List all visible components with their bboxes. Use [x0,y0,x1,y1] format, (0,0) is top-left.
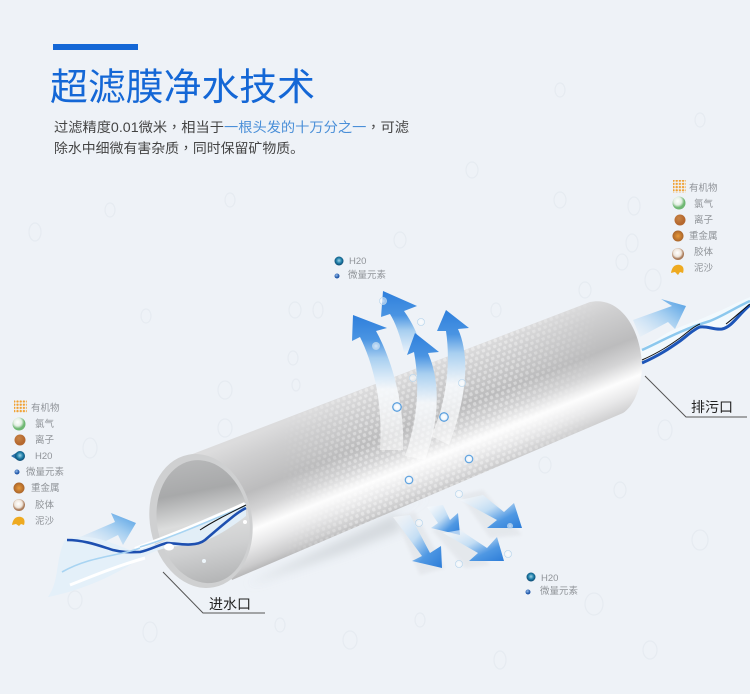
callout: outlet [645,376,747,417]
legend: inlet contents: 微量元素 [26,466,65,478]
icon: chlorine [672,196,686,210]
legend: top permeate: H20 [349,256,366,267]
legend: bottom permeate: H20 [541,573,558,584]
icon: sediment [12,517,25,526]
water stream inlet [48,503,247,597]
icon: ion [674,214,686,226]
legend: outlet contents: 有机物 [689,182,718,194]
legend: outlet contents: 离子 [694,214,714,226]
legend: inlet contents: H20 [35,451,52,462]
icon: organic dots [673,180,686,193]
icon: H2O [526,572,536,582]
callout: inlet [163,572,265,613]
pipe shadow [247,497,430,585]
legend: inlet contents: 泥沙 [35,515,55,527]
icon: trace element [334,274,340,278]
description text: 除水中细微有害杂质 ，同时保留矿物质。 [54,141,304,156]
arrow ghost bands [395,490,522,575]
legend: outlet contents [671,180,718,275]
description text: 过滤精度0.01微米 ，相当于一根头发的十万分之一 ，可滤 [54,120,410,135]
icon: heavy metal [672,230,684,242]
icon: chlorine [12,418,26,430]
legend: top permeate: 微量元素 [348,269,387,281]
description text [54,120,410,156]
legend: inlet contents [11,400,65,527]
icon: colloid [672,248,684,260]
legend: bottom permeate [526,572,579,597]
arrow: outlet flow [633,299,686,337]
pipe opening [138,445,264,597]
arrows: upward through membrane [352,291,469,460]
legend: inlet contents: 氯气 [35,418,55,430]
mesh texture [310,322,566,546]
title: 超滤膜净水技术 [50,66,315,108]
legend: inlet contents: 胶体 [35,499,55,511]
icon: H2O [11,451,25,461]
water droplets [372,297,513,568]
water stream outlet [640,297,750,364]
callout: outlet: 排污口 [691,399,733,415]
icon: organic dots [14,400,27,413]
legend: inlet contents: 有机物 [31,402,60,414]
icon: ion [14,434,26,446]
legend: outlet contents: 胶体 [694,246,714,258]
legend: outlet contents: 泥沙 [694,262,714,274]
title accent bar [53,44,138,50]
arrow: inlet flow [80,513,136,545]
icon: trace element [14,470,20,474]
callout: inlet: 进水口 [209,596,251,612]
pipe [138,301,642,597]
legend: outlet contents: 重金属 [689,230,718,242]
legend: inlet contents: 重金属 [31,482,60,494]
icon: trace element [526,590,530,594]
legend: top permeate [334,256,387,281]
legend: outlet contents: 氯气 [694,198,714,210]
icon: H2O [334,256,344,266]
legend: bottom permeate: 微量元素 [540,585,579,597]
icon: heavy metal [14,482,24,494]
icon: sediment [671,265,684,275]
arrows: downward discharge [393,495,522,568]
legend: inlet contents: 离子 [35,434,55,446]
icon: colloid [13,499,25,511]
